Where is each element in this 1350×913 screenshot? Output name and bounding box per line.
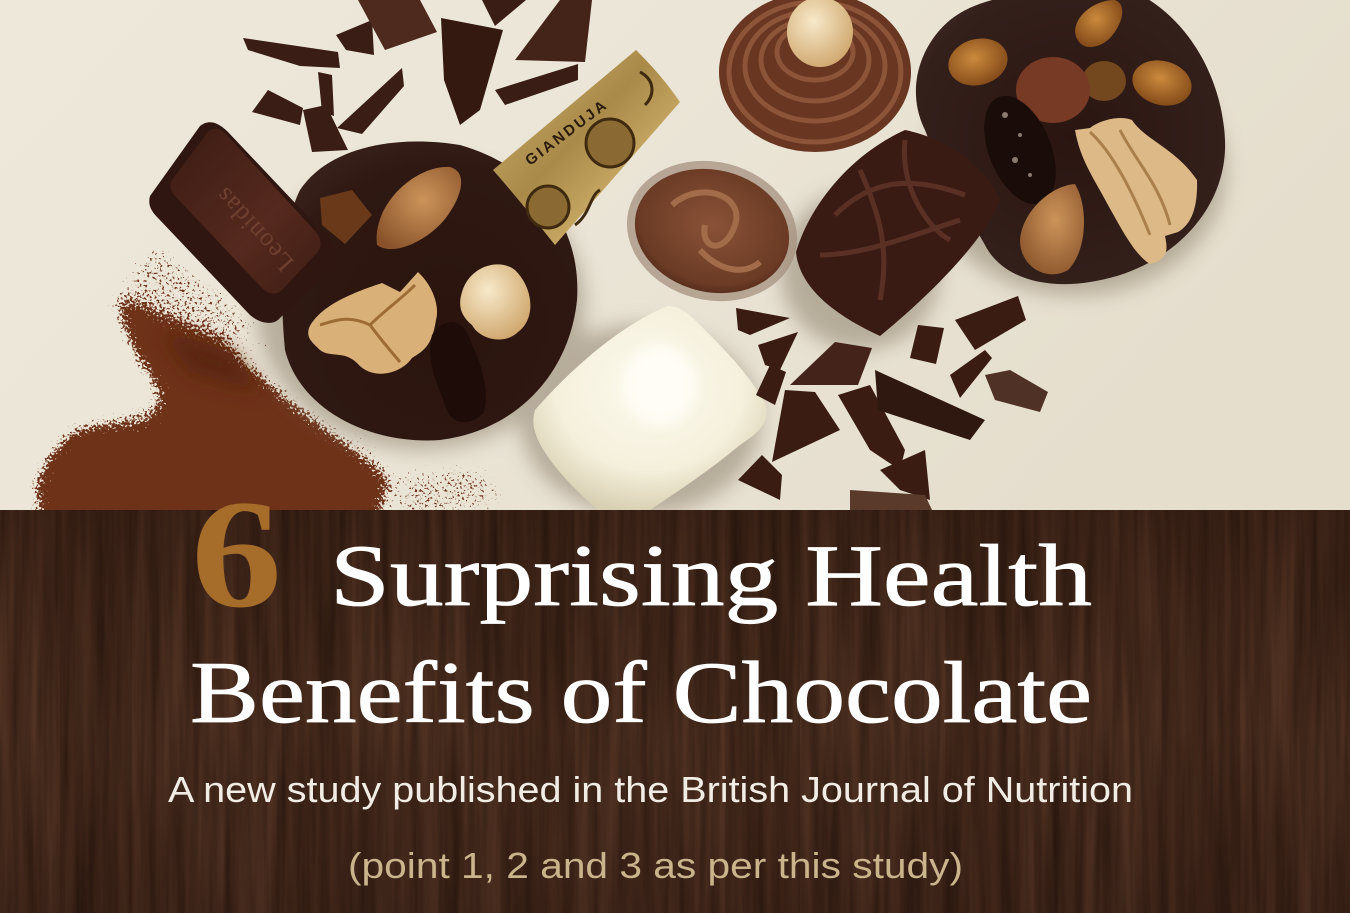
soft shadows under pieces	[255, 45, 1225, 515]
title number 6: 6	[191, 468, 282, 640]
study note: (point 1, 2 and 3 as per this study)	[348, 845, 963, 886]
title banner: wood background	[0, 510, 1350, 913]
oval milk praline	[612, 143, 812, 319]
cocoa powder pile	[34, 235, 520, 530]
photo background: cream surface	[0, 0, 1350, 510]
icon: almond	[377, 167, 461, 249]
tablet brand: Leonidas	[209, 181, 299, 277]
dark bar with web pattern	[796, 130, 1000, 336]
title line 1: Surprising Health	[330, 528, 1092, 625]
subtitle: A new study published in the British Journal of Nutrition	[168, 769, 1133, 810]
title line 2: Benefits of Chocolate	[190, 645, 1092, 742]
icon: dark raisin	[970, 86, 1070, 214]
wrapper label: GIANDUJA	[522, 96, 612, 169]
chocolate shards lower right	[736, 296, 1048, 510]
gold wrapped bar	[493, 50, 680, 245]
icon: almond	[1020, 184, 1084, 274]
chocolate shards top left	[243, 0, 592, 152]
icon: dark raisin	[430, 322, 486, 422]
dark chocolate disc top right	[916, 0, 1225, 284]
icon: hazelnut	[1016, 57, 1090, 123]
dark chocolate disc with nuts	[282, 141, 577, 440]
icon: small raisin	[320, 190, 372, 244]
chocolate tablet	[149, 122, 336, 323]
icon: raisins	[943, 0, 1197, 112]
swirl chocolate with hazelnut	[719, 0, 911, 152]
white chocolate praline	[533, 306, 767, 510]
icon: hazelnut	[460, 264, 530, 339]
icon: walnut	[308, 272, 437, 374]
icon: walnut	[1075, 118, 1197, 264]
